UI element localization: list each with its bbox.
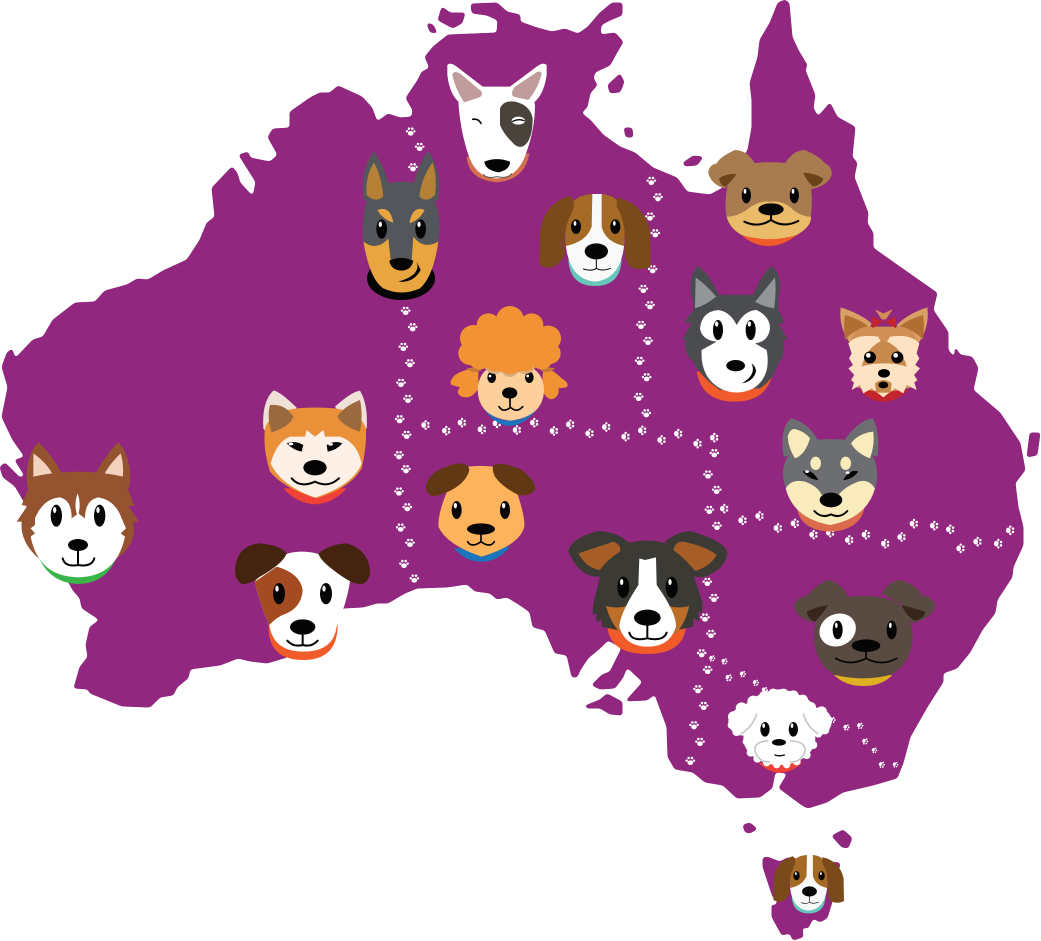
Melville and Bathurst islands xyxy=(427,7,465,33)
dog: orange poodle xyxy=(451,306,568,426)
dog: yorkshire terrier xyxy=(840,307,928,402)
dog: dark brown dog with eye patch xyxy=(794,580,935,686)
dog: akita xyxy=(263,391,367,504)
Gulf islands xyxy=(608,74,703,166)
Fraser island xyxy=(1027,433,1040,457)
dog: doberman xyxy=(363,153,440,300)
paw trail: south-east section xyxy=(685,470,1014,769)
dog: tricolour collie xyxy=(568,531,727,654)
dog: orange puppy xyxy=(426,463,535,562)
Kangaroo island xyxy=(585,694,622,715)
paw print trails xyxy=(394,127,1014,769)
paw trail: south-west section xyxy=(394,487,419,583)
dog: bull terrier xyxy=(447,64,547,182)
paw trail: north-east section xyxy=(530,177,719,457)
Tasmania xyxy=(763,857,840,940)
dog: jack russell xyxy=(235,543,370,660)
dog: brown husky xyxy=(17,443,139,584)
dog: tan floppy-eared dog xyxy=(708,150,832,246)
paw trail: north-west section xyxy=(394,127,521,473)
dog: bichon frise xyxy=(728,689,832,773)
dog: shiba inu xyxy=(783,420,877,532)
dog: beagle xyxy=(539,194,651,286)
dog: grey husky xyxy=(682,267,788,402)
Bass Strait islands xyxy=(743,823,852,848)
dog: small beagle on Tasmania xyxy=(773,855,844,913)
